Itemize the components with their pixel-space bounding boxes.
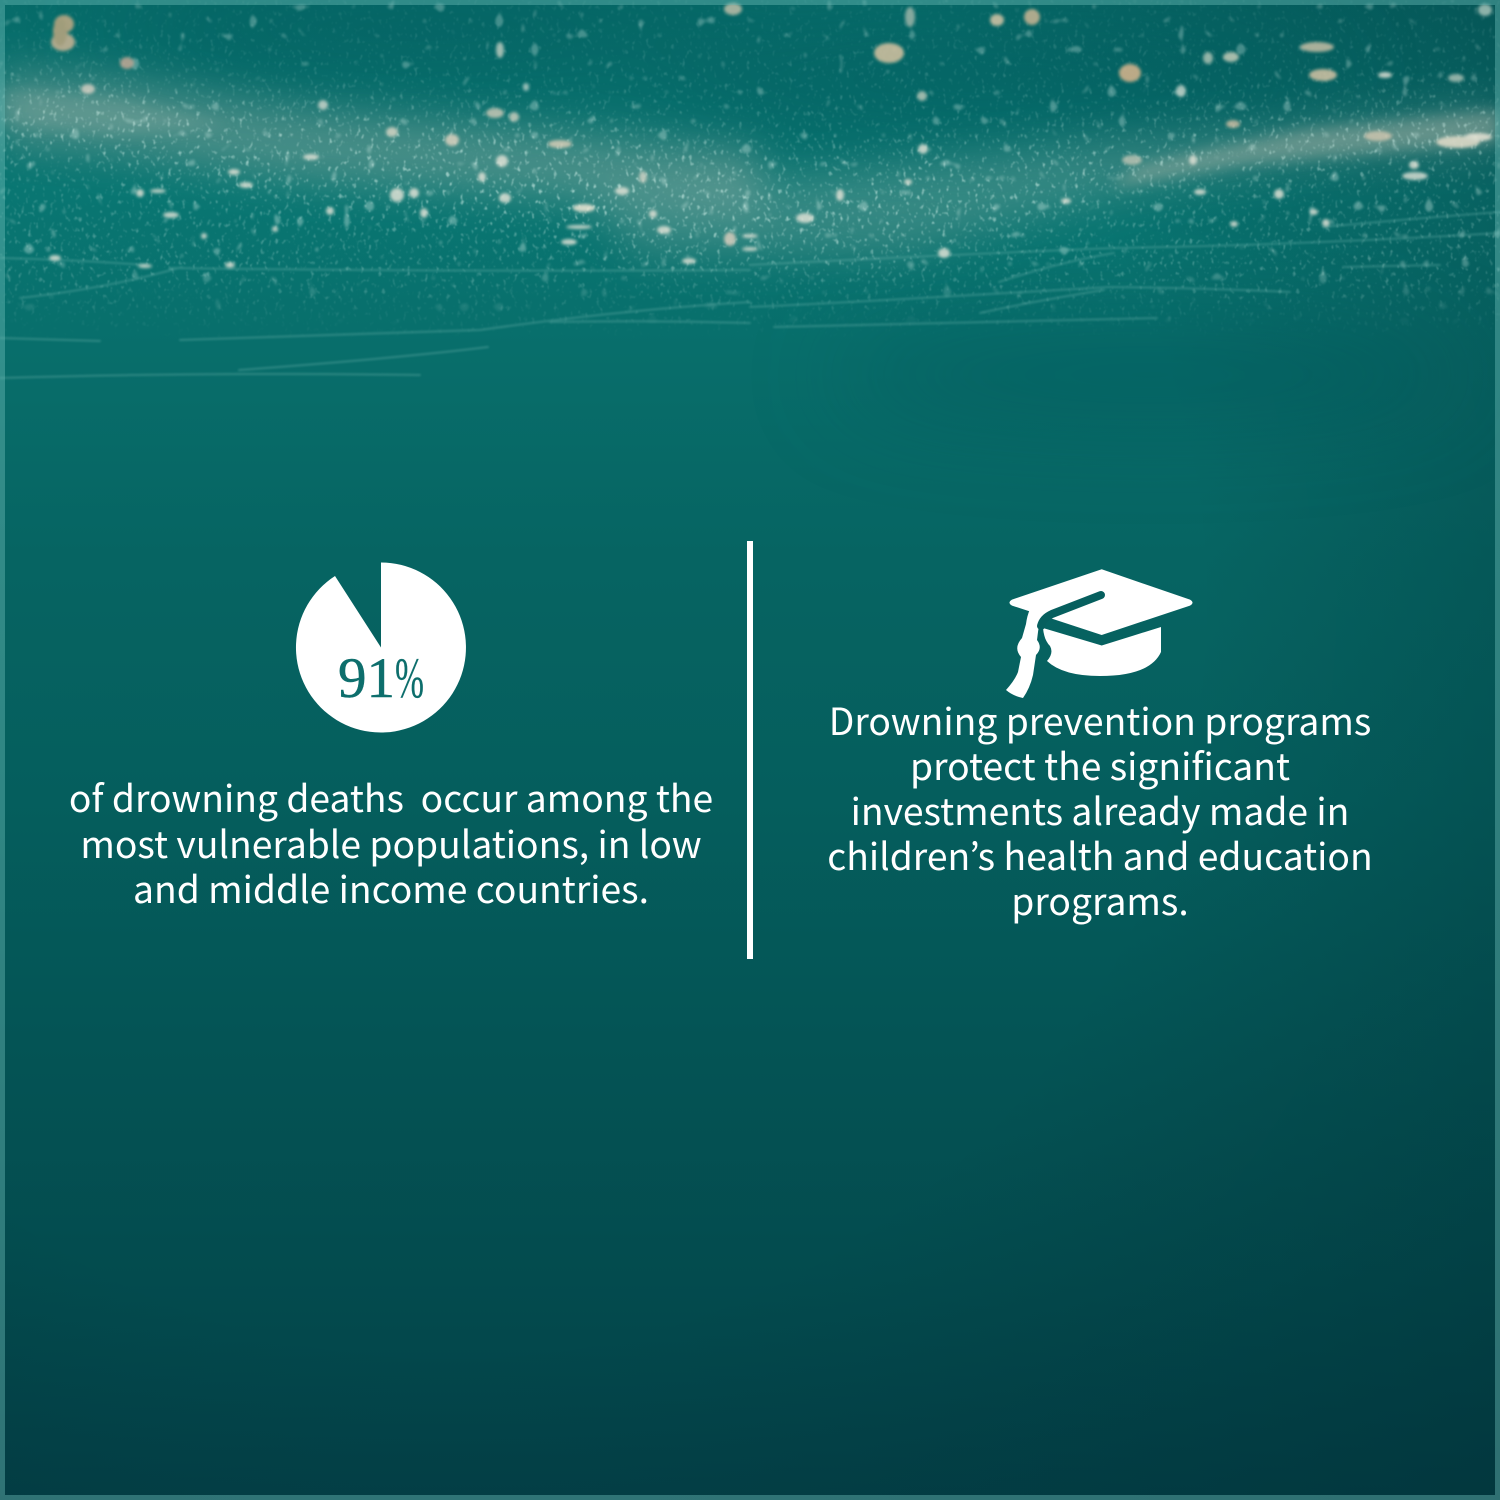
text block: prevention programs: programs. xyxy=(1011,872,1189,926)
icon: graduation cap xyxy=(1006,569,1192,698)
text block: prevention programs: Drowning prevention programs xyxy=(829,692,1371,746)
divider xyxy=(747,541,753,959)
text block: vulnerable populations xyxy=(69,769,713,914)
text block: vulnerable populations: most vulnerable populations, in low xyxy=(80,815,702,869)
text block: prevention programs: protect the significant xyxy=(910,737,1290,791)
pie chart icon: 91% xyxy=(296,562,466,732)
pie value: % xyxy=(395,647,424,710)
text block: vulnerable populations: of drowning deaths occur among the xyxy=(69,769,713,823)
text block: prevention programs: children’s health and education xyxy=(827,827,1373,881)
pie value xyxy=(338,647,424,710)
text block: vulnerable populations: and middle income countries. xyxy=(133,860,649,914)
text block: prevention programs: investments already made in xyxy=(851,782,1349,836)
pie value: 91 xyxy=(338,647,395,710)
text block: prevention programs xyxy=(827,692,1373,926)
